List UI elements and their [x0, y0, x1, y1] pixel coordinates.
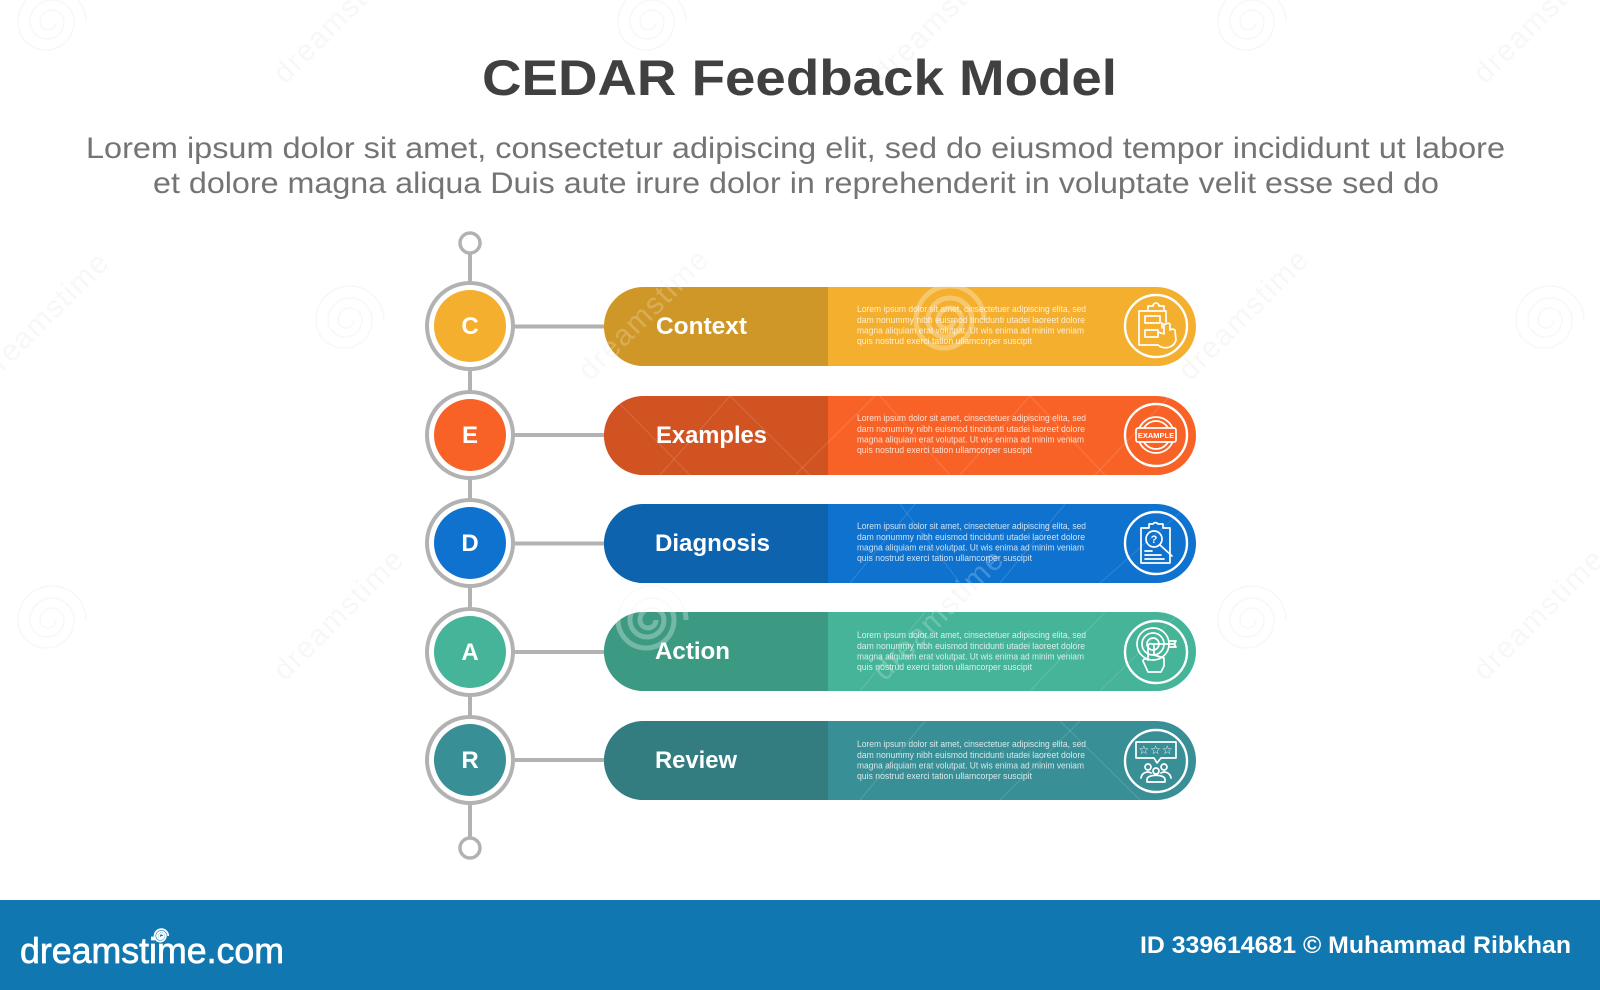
bar: [604, 287, 1196, 366]
footer band: [0, 900, 1600, 990]
footer logo: dreamstime.com: [20, 930, 284, 971]
row: Action: [427, 609, 1196, 695]
letter badge E: E: [462, 422, 478, 449]
background watermark pattern: [0, 0, 1600, 687]
letter badge D: D: [461, 530, 479, 557]
subtitle text block: et dolore magna aliqua Duis aute irure dolor in reprehenderit in voluptate velit esse sed do: [153, 167, 1439, 200]
description: [857, 413, 1086, 455]
bar: [604, 504, 1196, 583]
label: Review: [655, 747, 737, 774]
icon: example stamp: EXAMPLE: [1138, 431, 1174, 440]
description: [857, 739, 1086, 781]
description: magna aliquiam erat volutpat. Ut wis enima ad minim veniam: [857, 760, 1084, 770]
footer credit: ID 339614681 © Muhammad Ribkhan: [1140, 932, 1571, 959]
background watermark pattern: dreamstime: [1172, 243, 1315, 387]
letter badge C: C: [461, 313, 479, 340]
background watermark pattern: dreamstime: [572, 243, 715, 387]
bar: [604, 612, 1196, 691]
description: quis nostrud exerci tation ullamcorper suscipit: [857, 336, 1032, 346]
description: [857, 304, 1086, 346]
label: Context: [656, 313, 747, 340]
description: [857, 521, 1086, 563]
description: dam nonummy nibh euismod tincidunti utadei laoreet dolore: [857, 424, 1085, 434]
description: dam nonummy nibh euismod tincidunti utadei laoreet dolore: [857, 532, 1085, 542]
icon: logo spiral: [155, 929, 168, 942]
watermark overlay on bars: dreamstime: [572, 243, 715, 387]
row: Examples: [427, 392, 1196, 478]
icon: clipboard with magnifier: [1125, 512, 1187, 574]
description: dam nonummy nibh euismod tincidunti utadei laoreet dolore: [857, 641, 1085, 651]
letter badge C: [427, 283, 513, 369]
letter badge A: A: [461, 639, 479, 666]
description: dam nonummy nibh euismod tincidunti utadei laoreet dolore: [857, 315, 1085, 325]
letter badge R: R: [461, 747, 479, 774]
description: quis nostrud exerci tation ullamcorper suscipit: [857, 553, 1032, 563]
bar: [604, 721, 1196, 800]
description: dam nonummy nibh euismod tincidunti utadei laoreet dolore: [857, 750, 1085, 760]
background watermark pattern: dreamstime: [867, 543, 1010, 687]
letter badge A: [427, 609, 513, 695]
label: Diagnosis: [655, 530, 770, 557]
subtitle text block: [86, 132, 1505, 200]
description: Lorem ipsum dolor sit amet, cinsectetuer adipiscing elita, sed: [857, 739, 1086, 749]
description: Lorem ipsum dolor sit amet, cinsectetuer adipiscing elita, sed: [857, 521, 1086, 531]
description: quis nostrud exerci tation ullamcorper suscipit: [857, 662, 1032, 672]
icon: example stamp: [1125, 404, 1187, 466]
watermark overlay on bars: [572, 243, 1190, 800]
label: Action: [655, 638, 730, 665]
icon: star rating with people: [1125, 730, 1187, 792]
description: magna aliquiam erat volutpat. Ut wis enima ad minim veniam: [857, 434, 1084, 444]
label: Examples: [656, 422, 767, 449]
description: quis nostrud exerci tation ullamcorper suscipit: [857, 445, 1032, 455]
background watermark pattern: dreamstime: [267, 543, 410, 687]
vertical timeline line with end nodes: [460, 233, 480, 858]
description: quis nostrud exerci tation ullamcorper suscipit: [857, 771, 1032, 781]
description: magna aliquiam erat volutpat. Ut wis enima ad minim veniam: [857, 652, 1084, 662]
letter badge R: [427, 717, 513, 803]
row: Review: [427, 717, 1196, 803]
icon: clipboard with magnifier: ?: [1151, 534, 1158, 546]
description: Lorem ipsum dolor sit amet, cinsectetuer adipiscing elita, sed: [857, 413, 1086, 423]
description: Lorem ipsum dolor sit amet, cinsectetuer adipiscing elita, sed: [857, 304, 1086, 314]
icon: clipboard with hand: [1125, 295, 1187, 357]
letter badge D: [427, 500, 513, 586]
watermark overlay on bars: dreamstime: [867, 543, 1010, 687]
description: Lorem ipsum dolor sit amet, cinsectetuer adipiscing elita, sed: [857, 630, 1086, 640]
row: Context: [427, 283, 1196, 369]
subtitle text block: Lorem ipsum dolor sit amet, consectetur adipiscing elit, sed do eiusmod tempor incididunt ut labore: [86, 132, 1505, 165]
description: magna aliquiam erat volutpat. Ut wis enima ad minim veniam: [857, 326, 1084, 336]
title: CEDAR Feedback Model: [482, 50, 1117, 106]
bar: [604, 396, 1196, 475]
icon: target with hand: [1125, 621, 1187, 683]
letter badge E: [427, 392, 513, 478]
description: magna aliquiam erat volutpat. Ut wis enima ad minim veniam: [857, 542, 1084, 552]
row: Diagnosis: [427, 500, 1196, 586]
description: [857, 630, 1086, 672]
icon: star rating with people: ☆☆☆: [1138, 743, 1174, 757]
